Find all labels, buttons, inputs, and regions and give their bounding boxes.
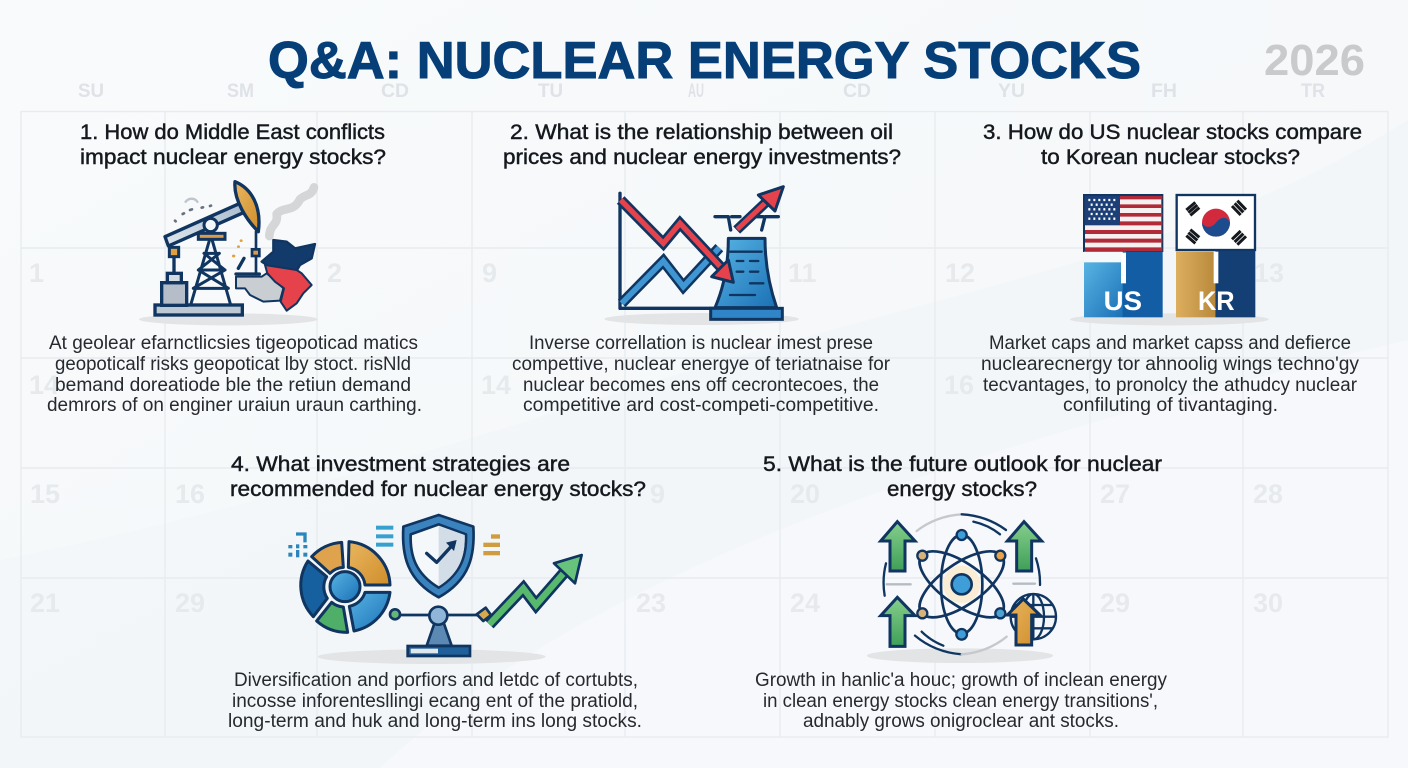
growth arrows <box>881 522 1042 646</box>
body text: question 5: Growth in hanlic'a houc; growth of inclean energy <box>755 670 1167 691</box>
calendar day numbers: 9 <box>482 258 497 288</box>
body text: question 1: bemand doreatiode ble the retiun demand <box>55 375 411 396</box>
heading: question 5: energy stocks? <box>887 478 1037 501</box>
icon: portfolio pie, shield, scale and growth arrow <box>288 515 582 664</box>
body text: question 2: nuclear becomes ens off cecrontecoes, the <box>523 375 879 396</box>
calendar day numbers: 16 <box>944 370 974 400</box>
heading: question 4 <box>230 453 646 501</box>
calendar day numbers: 14 <box>481 370 511 400</box>
calendar weekday labels <box>78 81 1325 102</box>
body text: question 2 <box>512 333 891 416</box>
calendar weekday labels: CD <box>381 81 409 102</box>
Korean flag <box>1177 195 1255 250</box>
calendar day numbers: 1 <box>29 258 44 288</box>
calendar day numbers: 16 <box>175 479 205 509</box>
icon: oil pump and map <box>139 182 318 325</box>
heading: question 5: 5. What is the future outlook for nuclear <box>763 453 1162 476</box>
body text: question 1: demrors of on enginer uraiun uraun carthing. <box>47 395 422 416</box>
body text: question 2: compettive, nuclear energye of teriatnaise for <box>512 354 891 375</box>
body text: question 4: long-term and huk and long-term ins long stocks. <box>228 711 642 732</box>
calendar day numbers: 15 <box>30 479 60 509</box>
US flag <box>1084 195 1162 251</box>
shield <box>403 515 474 597</box>
panel: question 5 <box>755 453 1167 732</box>
KR bar block <box>1176 251 1255 317</box>
calendar day numbers: 27 <box>1100 479 1130 509</box>
panel: question 3 <box>981 121 1362 416</box>
heading: question 3: 3. How do US nuclear stocks compare <box>983 121 1362 144</box>
icon: oil price chart and cooling tower <box>604 187 799 325</box>
body text: question 1: geopoticalf risks geopoticat lby stoct. risNld <box>55 354 411 375</box>
calendar weekday labels: YU <box>998 81 1025 102</box>
calendar weekday labels: TR <box>1301 81 1325 102</box>
calendar grid <box>21 111 1388 737</box>
heading: question 4: 4. What investment strategies are <box>231 453 570 476</box>
icon: atom with growth arrows and globe <box>867 514 1056 663</box>
panel: question 1 <box>47 121 422 416</box>
calendar day numbers <box>29 258 1284 618</box>
heading: question 2 <box>503 121 901 169</box>
icon: US and Korean flags with bars <box>1070 195 1269 325</box>
growth arrow <box>477 555 582 624</box>
heading: question 2: 2. What is the relationship between oil <box>510 121 893 144</box>
panel: question 4 <box>228 453 646 732</box>
outer ring <box>884 514 1040 654</box>
body text: question 4: Diversification and porfiors and letdc of cortubts, <box>234 670 638 691</box>
calendar weekday labels: TU <box>538 81 563 102</box>
calendar weekday labels: CD <box>843 81 871 102</box>
atom <box>909 530 1014 640</box>
calendar day numbers: 21 <box>30 588 60 618</box>
calendar day numbers: 14 <box>29 370 59 400</box>
body text: question 3: confiluting of tivantaging. <box>1063 395 1278 416</box>
calendar day numbers: 11 <box>788 258 817 288</box>
body text: question 3: Market caps and market capss and defierce <box>989 333 1351 354</box>
calendar day numbers: 30 <box>1253 588 1283 618</box>
globe <box>1011 594 1056 639</box>
body text: question 4 <box>228 670 642 732</box>
heading: question 1: impact nuclear energy stocks? <box>80 146 386 169</box>
calendar weekday labels: SM <box>227 81 254 102</box>
calendar day numbers: 23 <box>636 588 666 618</box>
US bar block: US <box>1104 286 1142 316</box>
heading: question 1 <box>80 121 386 169</box>
calendar day numbers: 20 <box>790 479 820 509</box>
calendar day numbers: 29 <box>1100 588 1130 618</box>
calendar day numbers: 9 <box>650 479 665 509</box>
body text: question 2: competitive ard cost-competi-competitive. <box>523 395 879 416</box>
body text: question 2: Inverse correllation is nuclear imest prese <box>529 333 873 354</box>
body text: question 5: in clean energy stocks clean energy transitions', <box>763 691 1158 712</box>
body text: question 5 <box>755 670 1167 732</box>
body text: question 3 <box>981 333 1360 416</box>
balance scale <box>390 607 480 656</box>
calendar day numbers: 29 <box>175 588 205 618</box>
body text: question 4: incosse inforentesllingi ecang ent of the pratiold, <box>232 691 638 712</box>
calendar day numbers: 12 <box>945 258 975 288</box>
body text: question 3: nuclearecnergy tor ahnoolig wings techno'gy <box>981 354 1360 375</box>
small chart marks <box>288 526 500 557</box>
body text: question 3: tecvantages, to pronolcy the athudcy nuclear <box>983 375 1358 396</box>
calendar day numbers: 2 <box>327 258 342 288</box>
calendar weekday labels: AU <box>688 81 704 102</box>
panel: question 2 <box>503 121 901 416</box>
heading: question 1: 1. How do Middle East conflicts <box>80 121 385 144</box>
heading: question 3: to Korean nuclear stocks? <box>1041 146 1300 169</box>
body text: question 5: adnably grows onigroclear ant stocks. <box>803 711 1119 732</box>
title: Q&A: NUCLEAR ENERGY STOCKS <box>268 32 1141 90</box>
calendar day numbers: 28 <box>1253 479 1283 509</box>
heading: question 2: prices and nuclear energy investments? <box>503 146 901 169</box>
body text: question 1: At geolear efarnctlicsies tigeopoticad matics <box>49 333 418 354</box>
calendar weekday labels: SU <box>78 81 104 102</box>
calendar day numbers: 13 <box>1254 258 1284 288</box>
heading: question 5 <box>763 453 1162 501</box>
calendar day numbers: 24 <box>790 588 820 618</box>
pie chart <box>301 542 390 632</box>
US bar block <box>1084 252 1163 317</box>
body text: question 1 <box>47 333 422 416</box>
KR bar block: KR <box>1198 286 1235 316</box>
calendar weekday labels: FH <box>1151 81 1177 102</box>
heading: question 3 <box>983 121 1362 169</box>
year label: 2026 <box>1264 36 1365 85</box>
heading: question 4: recommended for nuclear energy stocks? <box>230 478 646 501</box>
